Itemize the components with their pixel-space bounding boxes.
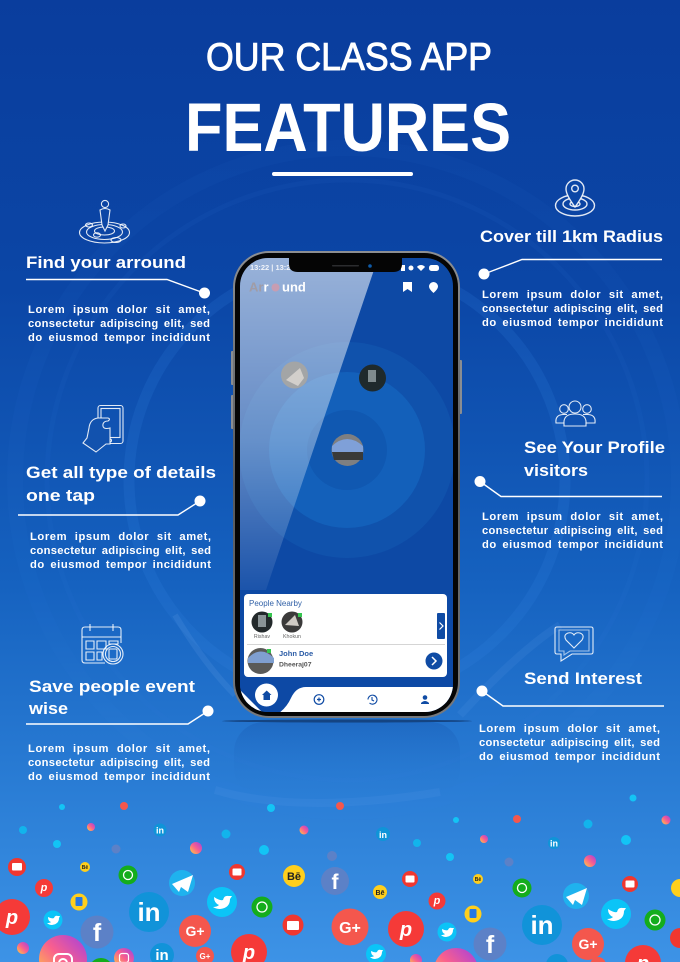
icon: behance: Bē — [287, 871, 301, 883]
app logo — [249, 282, 305, 292]
notch — [289, 256, 402, 272]
icon: whatsapp — [89, 866, 666, 962]
icon: pinterest: p — [40, 882, 48, 894]
text block: do eiusmod tempor incididunt — [479, 751, 660, 763]
glass reflection — [240, 258, 378, 590]
status bar: 13:22 | 13:26 — [250, 263, 295, 272]
text block — [482, 289, 663, 329]
icon: google plus — [179, 908, 606, 962]
text block: Lorem ipsum dolor sit amet, — [479, 723, 660, 735]
icon: bookmark — [403, 282, 412, 292]
icon: add — [314, 695, 324, 704]
text block: Lorem ipsum dolor sit amet, — [30, 531, 211, 543]
heading: Find your arround — [26, 253, 186, 272]
radar rings — [269, 342, 453, 558]
icon: facebook: f — [332, 871, 340, 894]
heading — [26, 463, 216, 505]
icon: google plus: G+ — [339, 920, 361, 937]
icon: location — [429, 282, 438, 293]
icon: linkedin: in — [530, 910, 554, 940]
phone screen — [239, 258, 455, 715]
icon: map pin on rings — [556, 180, 594, 216]
connector — [474, 476, 662, 496]
heading: Send Interest — [524, 669, 642, 688]
scroll tab — [437, 613, 445, 639]
row of tiny icons — [19, 794, 670, 867]
icon: linkedin — [129, 826, 568, 962]
icon: telegram — [169, 870, 589, 909]
icon: facebook — [80, 867, 506, 960]
heading: Get all type of details — [26, 463, 216, 482]
icon: linkedin: in — [156, 826, 164, 836]
icon: pinterest: p — [433, 895, 441, 907]
text block — [482, 511, 663, 551]
john doe row: John Doe — [279, 649, 313, 658]
bottom nav — [240, 684, 453, 715]
connector — [478, 260, 662, 280]
phone mockup — [231, 251, 462, 718]
app logo: und — [282, 280, 306, 294]
icon: person on radar rings — [80, 200, 130, 243]
nearby avatars — [252, 612, 302, 640]
title: FEATURES — [185, 89, 511, 166]
heading: visitors — [524, 461, 588, 480]
icon: pinterest — [0, 879, 661, 962]
text block: consectetur adipiscing elit, sed — [482, 303, 663, 315]
feature: find your arround — [26, 200, 210, 344]
text block: do eiusmod tempor incididunt — [28, 332, 210, 344]
text block — [28, 304, 210, 344]
feature: send interest — [476, 627, 664, 763]
icon: linkedin: in — [137, 897, 161, 927]
app logo: r — [264, 280, 269, 294]
social media icons — [0, 794, 680, 962]
nearby avatars: Rishav — [254, 634, 270, 640]
app logo: Ar — [249, 280, 263, 294]
title: OUR CLASS APP — [206, 36, 492, 79]
text block: Lorem ipsum dolor sit amet, — [28, 304, 210, 316]
icon: pinterest: p — [399, 919, 412, 941]
john doe row — [248, 648, 442, 674]
text block: consectetur adipiscing elit, sed — [482, 525, 663, 537]
text block: consectetur adipiscing elit, sed — [28, 757, 210, 769]
text block: do eiusmod tempor incididunt — [30, 559, 211, 571]
text block: consectetur adipiscing elit, sed — [30, 545, 211, 557]
icon: google plus: G+ — [185, 923, 205, 939]
icon: facebook: f — [486, 931, 495, 959]
heading: wise — [28, 699, 68, 718]
people nearby card: People Nearby — [249, 599, 302, 608]
text block: Lorem ipsum dolor sit amet, — [482, 511, 663, 523]
people nearby card — [240, 590, 453, 715]
nearby avatars: Khokun — [283, 634, 301, 640]
icon: behance: Bē — [475, 877, 481, 883]
icon: linkedin: in — [550, 838, 558, 848]
icon: twitter — [44, 887, 631, 962]
icon: instagram — [17, 935, 478, 962]
text block — [479, 723, 660, 763]
text block: consectetur adipiscing elit, sed — [479, 737, 660, 749]
feature: cover till 1km radius — [478, 180, 663, 329]
text block: do eiusmod tempor incididunt — [482, 317, 663, 329]
icon: history — [368, 695, 377, 704]
icon: google plus: G+ — [578, 936, 598, 952]
icon: behance: Bē — [376, 890, 385, 897]
heading: Save people event — [29, 677, 195, 696]
connector — [26, 706, 214, 724]
heading — [524, 438, 665, 480]
phone frame — [231, 251, 462, 718]
text block: do eiusmod tempor incididunt — [482, 539, 663, 551]
feature: save people event wise — [26, 624, 214, 783]
heading: See Your Profile — [524, 438, 665, 457]
status icons — [401, 265, 439, 271]
icon: google plus: G+ — [200, 952, 211, 961]
text block: Lorem ipsum dolor sit amet, — [28, 743, 210, 755]
icon: book — [70, 894, 482, 922]
heading: one tap — [26, 486, 95, 505]
avatars on radar — [281, 362, 386, 466]
text block: Lorem ipsum dolor sit amet, — [482, 289, 663, 301]
icon: profile — [421, 695, 429, 704]
icon: linkedin: in — [379, 830, 387, 840]
text block — [30, 531, 211, 571]
connector — [18, 496, 206, 515]
title — [185, 36, 511, 176]
text block — [28, 743, 210, 783]
heading: Cover till 1km Radius — [480, 227, 663, 246]
feature: profile visitors — [474, 401, 665, 551]
icon: calendar — [82, 624, 123, 664]
icon: behance: Bē — [82, 865, 88, 871]
feature: details one tap — [18, 406, 216, 571]
icon: group of people — [556, 401, 595, 426]
icon: mail — [8, 858, 680, 948]
icon: hand holding phone — [83, 406, 123, 452]
icon: pinterest: p — [5, 907, 18, 929]
text block: consectetur adipiscing elit, sed — [28, 318, 210, 330]
john doe row: Dheeraj07 — [279, 662, 312, 668]
icon: heart speech bubble — [555, 627, 593, 661]
icon: facebook: f — [93, 919, 102, 947]
connector — [476, 686, 664, 706]
phone reflection — [222, 720, 472, 798]
camera — [332, 264, 372, 268]
icon: behance — [80, 862, 680, 899]
connector — [26, 280, 210, 298]
text block: do eiusmod tempor incididunt — [28, 771, 210, 783]
heading — [28, 677, 195, 718]
icon: home — [262, 690, 272, 700]
